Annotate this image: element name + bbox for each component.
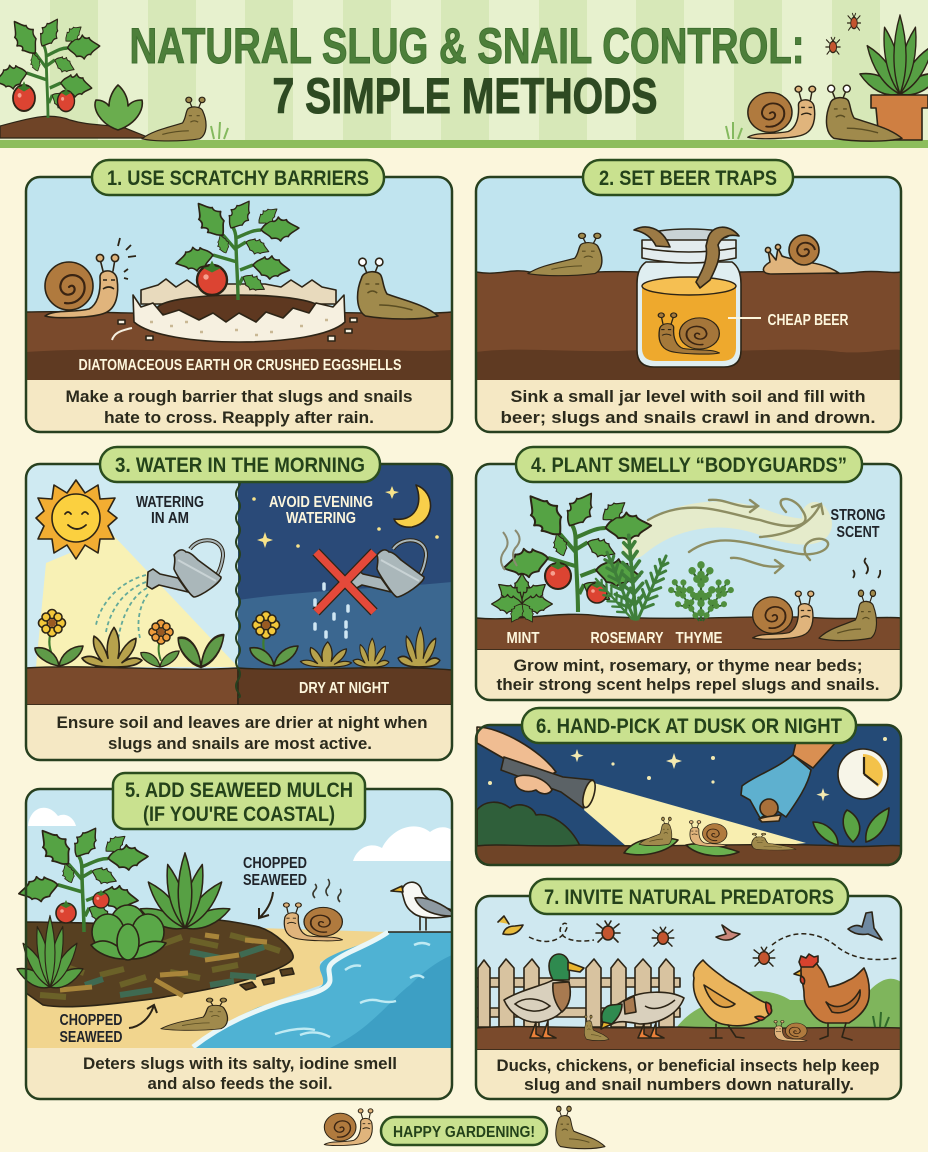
heading 6 [522, 708, 856, 743]
watering can, evening [350, 540, 426, 597]
header: garden left [0, 14, 228, 141]
gloved hand and snail [741, 742, 836, 822]
plant labels [506, 630, 723, 647]
jar with beer [634, 227, 741, 367]
heading 3 [100, 447, 380, 482]
caption band [26, 1048, 452, 1099]
strong scent label: STRONG [830, 507, 886, 524]
clock [838, 749, 888, 799]
evening label: WATERING [286, 510, 356, 527]
snail on leaf [689, 821, 727, 847]
slug [358, 258, 438, 319]
caption [56, 713, 428, 753]
barrier label: DIATOMACEOUS EARTH OR CRUSHED EGGSHELLS [78, 357, 402, 374]
plant labels: ROSEMARY [590, 630, 664, 647]
clouds [28, 808, 452, 861]
chopped seaweed label upper: SEAWEED [243, 872, 307, 889]
slug over right rim [696, 227, 739, 288]
hedge [676, 979, 901, 1028]
tomato plant [16, 822, 149, 932]
mallard duck two [601, 992, 684, 1038]
heading 4 [516, 447, 862, 482]
bush [477, 802, 580, 846]
heading 4: 4. PLANT SMELLY “BODYGUARDS” [531, 454, 847, 477]
heading 5 [113, 773, 365, 829]
soil [476, 1027, 901, 1050]
snail [45, 254, 119, 318]
header banner [0, 0, 928, 148]
morning plants [35, 610, 224, 667]
caption: Deters slugs with its salty, iodine smell [83, 1054, 397, 1073]
chopped seaweed label upper [243, 855, 307, 918]
slug [161, 998, 227, 1030]
caption: Sink a small jar level with soil and fill with [510, 387, 866, 406]
caption: hate to cross. Reapply after rain. [104, 408, 374, 427]
panel 7: natural predators [476, 896, 901, 1099]
heading 2: 2. SET BEER TRAPS [599, 167, 777, 190]
mallard duck one [504, 954, 584, 1038]
caption: slug and snail numbers down naturally. [524, 1075, 854, 1094]
snail [284, 903, 342, 941]
hand with flashlight [477, 727, 598, 809]
footer pill: HAPPY GARDENING! [393, 1124, 535, 1141]
strong scent label [830, 507, 886, 541]
morning label: IN AM [151, 510, 189, 527]
rooster two [794, 954, 869, 1040]
footer slug [556, 1106, 605, 1149]
caption: Ensure soil and leaves are drier at night when [56, 713, 428, 732]
dry at night label: DRY AT NIGHT [299, 680, 389, 697]
heading 5: (IF YOU'RE COASTAL) [143, 803, 335, 826]
evening plants [250, 612, 440, 667]
caption: Grow mint, rosemary, or thyme near beds; [514, 656, 862, 675]
panel 6: hand-pick at night [476, 725, 901, 865]
strong scent label: SCENT [836, 524, 880, 541]
sea [193, 932, 452, 1048]
rosemary [591, 534, 673, 623]
water drops [96, 575, 148, 640]
slug on soil [528, 233, 602, 276]
caption: Ducks, chickens, or beneficial insects help keep [496, 1056, 880, 1075]
seaweed mulch [26, 918, 294, 1007]
flying insects and birds [498, 912, 897, 966]
slug on soil [752, 833, 796, 850]
slug on leaf [639, 817, 672, 846]
moon and stars [252, 485, 439, 548]
small spiky plant [15, 916, 85, 993]
panel 4: smelly bodyguards [476, 464, 901, 700]
small grass [873, 1012, 889, 1027]
footer snail [324, 1109, 373, 1146]
tomato plant [173, 196, 300, 300]
sand [26, 928, 388, 1048]
seagull [391, 882, 452, 930]
caption [83, 1054, 397, 1093]
flashlight beam [584, 783, 806, 847]
sunlight beam [36, 535, 238, 667]
snail on soil [763, 235, 839, 274]
sun [36, 480, 117, 559]
title: 7 SIMPLE METHODS [272, 68, 658, 124]
heading 5: 5. ADD SEAWEED MULCH [125, 779, 353, 802]
morning label: WATERING [136, 494, 204, 511]
stars [488, 737, 887, 801]
title [130, 18, 804, 124]
spiky plant [138, 853, 232, 935]
watering can, morning [147, 540, 223, 597]
soil [476, 845, 901, 865]
heading 2 [583, 160, 793, 195]
caption: Make a rough barrier that slugs and snails [66, 387, 412, 406]
red X [316, 552, 374, 612]
evening label: AVOID EVENING [269, 494, 373, 511]
hen one [693, 960, 772, 1038]
lettuce [91, 905, 166, 960]
evening drops [315, 584, 348, 637]
caption: and also feeds the soil. [148, 1074, 332, 1093]
fence [476, 959, 680, 1027]
panel 1: scratchy barriers [26, 177, 452, 432]
scent wind swirls [635, 499, 828, 573]
horizon line [388, 931, 452, 933]
heading 1 [92, 160, 384, 195]
slug [819, 590, 876, 641]
small snail [774, 1020, 807, 1041]
leaves [624, 808, 889, 856]
panel 5: seaweed mulch [15, 789, 452, 1099]
beer label and pointer [728, 312, 849, 329]
snail [753, 591, 814, 639]
caption [66, 387, 412, 427]
chopped seaweed label upper: CHOPPED [243, 855, 307, 872]
surprise marks [118, 238, 136, 279]
chopped seaweed label lower [60, 1005, 157, 1046]
chopped seaweed label lower: CHOPPED [60, 1012, 122, 1029]
smell marks [853, 558, 880, 578]
caption: slugs and snails are most active. [108, 734, 372, 753]
morning label [136, 494, 204, 527]
plant labels: THYME [676, 630, 723, 647]
header: snail, slug and potted plant right [726, 13, 928, 141]
slug over left rim [634, 227, 670, 247]
heading 7 [530, 879, 848, 914]
caption [496, 1056, 880, 1094]
plant labels: MINT [506, 630, 540, 647]
heading 1: 1. USE SCRATCHY BARRIERS [107, 167, 369, 190]
panel 2: beer traps [476, 177, 901, 432]
heading 6: 6. HAND-PICK AT DUSK OR NIGHT [536, 715, 842, 738]
panel 3: water in the morning [26, 464, 452, 760]
footer [324, 1106, 605, 1149]
chopped seaweed label lower: SEAWEED [60, 1029, 122, 1046]
caption [496, 656, 880, 694]
small slug [584, 1015, 609, 1041]
caption: their strong scent helps repel slugs and snails. [496, 675, 880, 694]
caption: beer; slugs and snails crawl in and drown. [500, 408, 876, 427]
eggshell ring barrier [112, 279, 357, 342]
beer label and pointer: CHEAP BEER [768, 312, 849, 329]
mint [492, 530, 552, 625]
footer pill [381, 1117, 547, 1145]
caption [500, 387, 876, 427]
thyme [664, 559, 738, 626]
evening label [269, 494, 373, 527]
heading 3: 3. WATER IN THE MORNING [115, 454, 365, 477]
snail in beer [658, 313, 719, 354]
stink marks [313, 879, 341, 902]
heading 7: 7. INVITE NATURAL PREDATORS [544, 886, 834, 909]
tomato plant [500, 487, 652, 612]
